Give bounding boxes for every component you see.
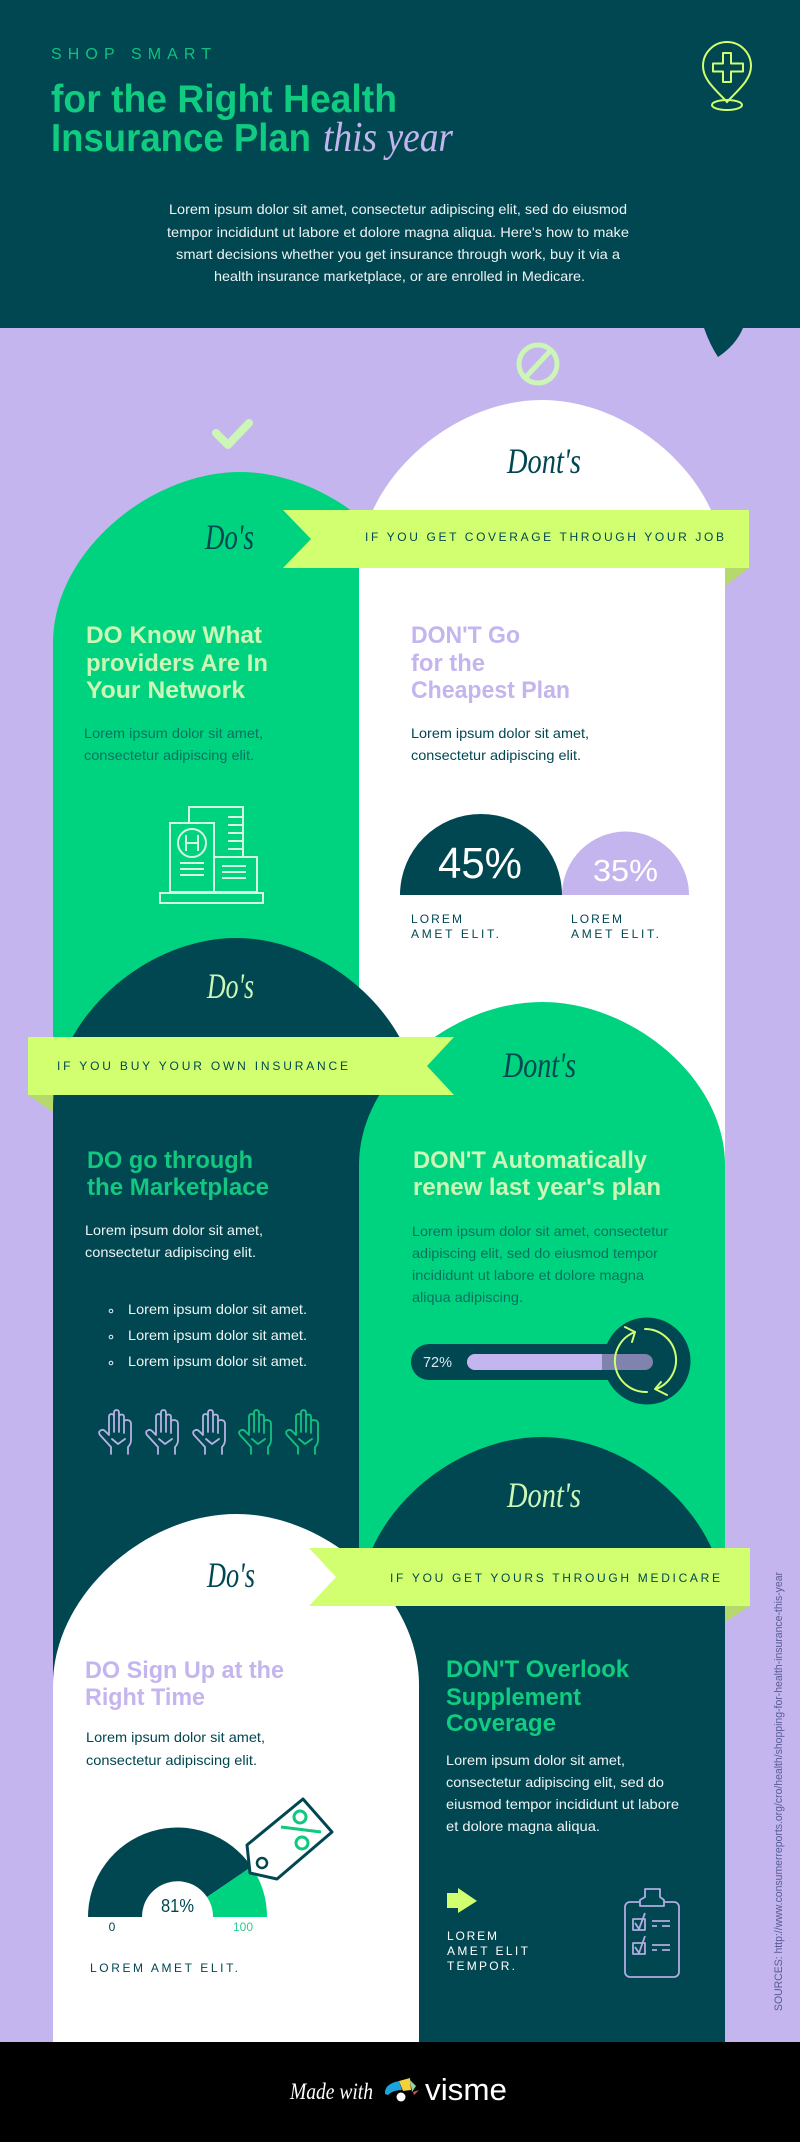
text block: do sign up at the right time: consectetur adipiscing elit. — [86, 1752, 257, 1768]
banner: if you buy your own insurance: IF YOU BUY YOUR OWN INSURANCE — [57, 1059, 351, 1073]
text block: don't automatically renew — [412, 1147, 668, 1305]
intro paragraph — [167, 201, 629, 284]
caption: lorem amet elit tempor: TEMPOR. — [447, 1959, 518, 1973]
chart: semicircle comparison 45% and 35%: LOREM — [411, 912, 465, 926]
chart: 81% gauge: 100 — [233, 1920, 253, 1934]
text block: don't go for the cheapest plan: for the — [411, 650, 485, 677]
text block: don't overlook supplement coverage: consectetur adipiscing elit, sed do — [446, 1774, 664, 1790]
footer — [0, 2042, 800, 2142]
text block: do go through the marketplace — [85, 1147, 269, 1260]
icons: five raised hands rating — [99, 1410, 318, 1454]
caption: lorem amet elit tempor — [447, 1929, 531, 1973]
caption: lorem amet elit tempor: AMET ELIT — [447, 1944, 531, 1958]
text block: don't automatically renew: adipiscing elit, sed do eiusmod tempor — [412, 1245, 658, 1261]
text block: do know what providers: providers Are In — [86, 650, 268, 677]
label: do's, section 1: Do's — [204, 517, 254, 557]
label: don'ts, section 1: Dont's — [506, 441, 581, 481]
chart: 81% gauge: 81% — [161, 1896, 194, 1916]
text block: don't automatically renew: renew last year's plan — [413, 1174, 661, 1201]
icon: lime arrow — [447, 1888, 477, 1913]
text block: don't go for the cheapest plan: DON'T Go — [411, 622, 520, 649]
text block: don't go for the cheapest plan: consectetur adipiscing elit. — [411, 747, 581, 763]
text block: do sign up at the right time: DO Sign Up at the — [85, 1657, 284, 1684]
text block: do sign up at the right time: Right Time — [85, 1684, 205, 1711]
text block: don't automatically renew: DON'T Automatically — [413, 1147, 648, 1174]
banner: if you get yours through medicare: IF YOU GET YOURS THROUGH MEDICARE — [390, 1571, 723, 1585]
text block: don't go for the cheapest plan — [411, 622, 589, 763]
panel: dark do's arch, section 2 — [53, 938, 419, 1720]
text block: do know what providers: consectetur adipiscing elit. — [84, 747, 254, 763]
chart: semicircle comparison 45% and 35%: LOREM — [571, 912, 625, 926]
panel: green do's arch, section 1 — [53, 472, 427, 1110]
chart: 72% progress bar with renew icon — [411, 1318, 690, 1404]
text block: do go through the marketplace: consectetur adipiscing elit. — [85, 1244, 256, 1260]
chart: 81% gauge — [88, 1828, 267, 1934]
icon: hospital building — [160, 807, 263, 903]
chart: semicircle comparison 45% and 35%: AMET ELIT. — [571, 927, 662, 941]
title: this year — [323, 115, 454, 161]
text block: don't overlook supplement coverage: Lorem ipsum dolor sit amet, — [446, 1752, 625, 1768]
text block: don't automatically renew: incididunt ut labore et dolore magna — [412, 1267, 644, 1283]
text block: don't overlook supplement coverage: Coverage — [446, 1710, 556, 1737]
bullet list: Lorem ipsum dolor sit amet. — [128, 1301, 307, 1317]
intro paragraph: tempor incididunt ut labore et dolore magna aliqua. Here's how to make — [167, 224, 629, 240]
label: do's, section 3: Do's — [206, 1555, 255, 1595]
icon: prohibited sign — [519, 345, 557, 383]
footer: visme — [425, 2072, 507, 2107]
icon: discount price tag — [247, 1799, 332, 1879]
text block: do sign up at the right time: Lorem ipsum dolor sit amet, — [86, 1729, 265, 1745]
text block: don't overlook supplement coverage: eiusmod tempor incididunt ut labore — [446, 1796, 679, 1812]
bullet list: Lorem ipsum dolor sit amet. — [128, 1353, 307, 1369]
text block: do go through the marketplace: the Marketplace — [87, 1174, 269, 1201]
text block: do go through the marketplace: Lorem ipsum dolor sit amet, — [85, 1222, 263, 1238]
label: don'ts, section 3: Dont's — [506, 1475, 581, 1515]
label: do's, section 2: Do's — [206, 966, 254, 1006]
text block: don't overlook supplement coverage: et dolore magna aliqua. — [446, 1818, 600, 1834]
logo: visme fan mark — [385, 2078, 419, 2102]
text block: do sign up at the right time — [85, 1657, 284, 1768]
caption: lorem amet elit tempor: LOREM — [447, 1929, 500, 1943]
gauge caption: LOREM AMET ELIT. — [90, 1961, 241, 1975]
text block: don't automatically renew: aliqua adipiscing. — [412, 1289, 523, 1305]
panel: dark don'ts arch, section 3 — [359, 1437, 725, 2042]
sources note: SOURCES: http://www.consumerreports.org/cro/health/shopping-for-health-insurance-this-year — [773, 1572, 785, 2011]
icon: clipboard checklist — [625, 1889, 679, 1977]
header panel — [0, 0, 800, 357]
chart: semicircle comparison 45% and 35%: AMET ELIT. — [411, 927, 502, 941]
title — [51, 78, 454, 161]
banner: if you buy your own insurance — [28, 1037, 454, 1112]
title: Insurance Plan — [51, 117, 311, 160]
chart: semicircle comparison 45% and 35% — [400, 814, 689, 941]
text block: don't overlook supplement coverage — [446, 1656, 679, 1834]
text block: don't go for the cheapest plan: Cheapest Plan — [411, 677, 570, 704]
kicker: shop smart: SHOP SMART — [51, 46, 211, 63]
banner: if you get coverage through your job — [283, 510, 749, 586]
intro paragraph: health insurance marketplace, or are enrolled in Medicare. — [214, 268, 585, 284]
text block: do know what providers: DO Know What — [86, 622, 262, 649]
text block: do know what providers: Your Network — [86, 677, 246, 704]
panel: white do's arch, section 3 — [53, 1514, 419, 2042]
icon: check mark — [216, 423, 249, 445]
footer: Made with — [289, 2079, 373, 2104]
bullet list: Lorem ipsum dolor sit amet. — [128, 1327, 307, 1343]
label: don'ts, section 2: Dont's — [502, 1045, 576, 1085]
text block: do go through the marketplace: DO go through — [87, 1147, 253, 1174]
text block: do know what providers — [84, 622, 268, 763]
icon: medical location pin — [703, 42, 751, 110]
text block: don't automatically renew: Lorem ipsum dolor sit amet, consectetur — [412, 1223, 668, 1239]
chart: 72% progress bar with renew icon: 72% — [423, 1354, 452, 1371]
panel: green don'ts arch, section 2 — [359, 1002, 725, 1600]
title: for the Right Health — [51, 78, 397, 121]
chart: semicircle comparison 45% and 35%: 35% — [593, 853, 658, 888]
banner: if you get coverage through your job: IF YOU GET COVERAGE THROUGH YOUR JOB — [365, 530, 727, 544]
intro paragraph: Lorem ipsum dolor sit amet, consectetur adipiscing elit, sed do eiusmod — [169, 201, 627, 217]
text block: do know what providers: Lorem ipsum dolor sit amet, — [84, 725, 263, 741]
text block: don't overlook supplement coverage: DON'T Overlook — [446, 1656, 630, 1683]
bullet list — [109, 1301, 307, 1369]
chart: 81% gauge: 0 — [109, 1920, 116, 1934]
panel: white don'ts arch, section 1 — [359, 400, 725, 1200]
intro paragraph: smart decisions whether you get insurance through work, buy it via a — [176, 246, 620, 262]
chart: semicircle comparison 45% and 35%: 45% — [438, 839, 522, 888]
text block: don't overlook supplement coverage: Supplement — [446, 1684, 581, 1711]
banner: if you get yours through medicare — [309, 1548, 750, 1622]
text block: don't go for the cheapest plan: Lorem ipsum dolor sit amet, — [411, 725, 589, 741]
